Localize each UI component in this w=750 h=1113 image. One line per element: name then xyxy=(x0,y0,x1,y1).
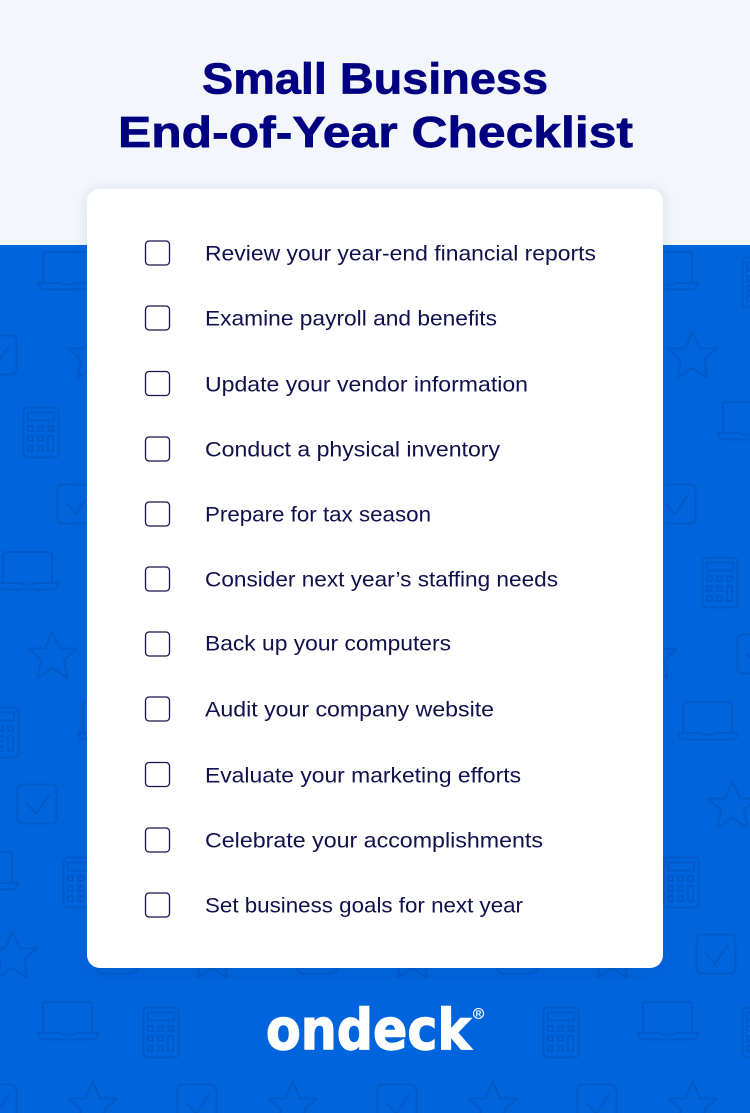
panel: checklist card xyxy=(87,189,663,968)
item: celebrate: Celebrate your accomplishments xyxy=(205,828,543,852)
title: Small Business xyxy=(202,54,548,104)
checklist items xyxy=(146,241,596,918)
title xyxy=(118,54,633,157)
item: inventory: Conduct a physical inventory xyxy=(205,438,500,462)
title: End-of-Year Checklist xyxy=(118,108,633,157)
item: tax season: Prepare for tax season xyxy=(205,502,431,526)
background icon pattern xyxy=(0,252,750,1113)
item: payroll: Examine payroll and benefits xyxy=(205,306,497,330)
item: staffing: Consider next year’s staffing needs xyxy=(205,568,558,592)
item: back up: Back up your computers xyxy=(205,632,451,656)
top background panel xyxy=(0,0,750,245)
blue background panel xyxy=(0,245,750,1113)
item: goals: Set business goals for next year xyxy=(205,894,523,918)
item: audit website: Audit your company website xyxy=(205,698,494,722)
item: vendor: Update your vendor information xyxy=(205,372,528,396)
logo: ondeck: ondeck xyxy=(266,998,473,1063)
logo: ondeck: R xyxy=(476,1010,482,1018)
item: marketing: Evaluate your marketing efforts xyxy=(205,764,521,788)
item: review reports: Review your year-end financial reports xyxy=(205,242,596,266)
